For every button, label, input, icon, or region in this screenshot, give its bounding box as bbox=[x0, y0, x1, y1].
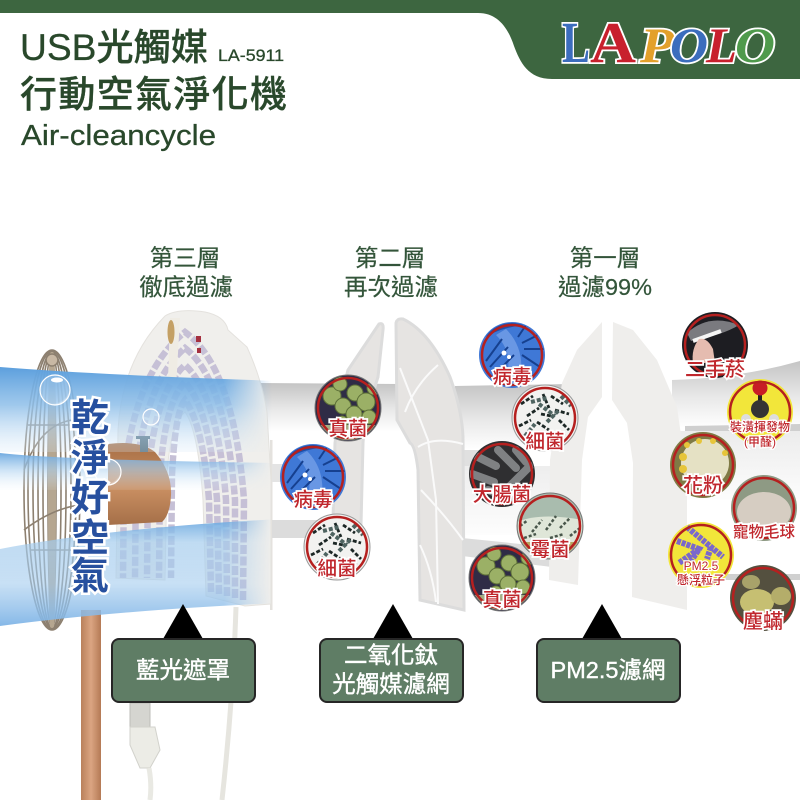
badge: mold bbox=[517, 493, 583, 561]
badge: second-hand smoke: 二手菸 bbox=[685, 358, 745, 381]
badge: dust mites bbox=[730, 565, 796, 633]
logo: L bbox=[705, 17, 737, 73]
button: TiO2 filter bbox=[320, 639, 463, 702]
badge: fungus 2: 真菌 bbox=[482, 589, 522, 611]
layer heading: third layer: 徹底過濾 bbox=[139, 274, 233, 300]
badge: virus 1: 病毒 bbox=[293, 489, 333, 511]
clean-air blue ribbons bbox=[0, 367, 280, 626]
button: TiO2 filter: 光觸媒濾網 bbox=[332, 671, 450, 697]
badge: formaldehyde: (甲醛) bbox=[744, 434, 776, 449]
badge: PM2.5 particles: 懸浮粒子 bbox=[677, 572, 725, 587]
title: 行動空氣淨化機 bbox=[20, 74, 287, 115]
layer heading: second layer bbox=[344, 245, 438, 300]
vertical slogan: 空 bbox=[71, 518, 109, 560]
fan: pole bbox=[81, 610, 101, 800]
badge: mold: 霉菌 bbox=[530, 539, 570, 561]
badge: PM2.5 particles: PM2.5 bbox=[684, 559, 719, 573]
badge: pollen: 花粉 bbox=[683, 474, 723, 497]
button: TiO2 filter: 二氧化鈦 bbox=[344, 642, 438, 668]
filter: third layer arched blue-light shield bbox=[116, 311, 271, 606]
badge: pollen bbox=[670, 432, 736, 498]
layer heading: first layer bbox=[558, 245, 652, 300]
button: PM2.5 filter bbox=[537, 639, 680, 702]
cable bbox=[222, 607, 236, 800]
badge: fungus 1 bbox=[315, 375, 381, 442]
vertical slogan: 氣 bbox=[71, 556, 109, 598]
fan: motor housing bbox=[108, 436, 171, 525]
badge: bacteria 2 bbox=[512, 385, 578, 453]
button: blue light shield: 藍光遮罩 bbox=[136, 657, 230, 683]
title: Air-cleancycle bbox=[21, 120, 216, 152]
button: blue light shield bbox=[112, 639, 255, 702]
badge: formaldehyde bbox=[727, 379, 793, 449]
badge: E. coli bbox=[469, 441, 535, 507]
title: LA-5911 bbox=[218, 46, 284, 65]
badge: E. coli: 大腸菌 bbox=[473, 484, 531, 506]
logo: P bbox=[639, 17, 675, 73]
title: USB光觸媒 bbox=[20, 27, 208, 68]
header band bbox=[0, 0, 800, 79]
badge: bacteria 1: 細菌 bbox=[317, 558, 357, 580]
badge: PM2.5 particles bbox=[668, 522, 734, 588]
badge: virus 2 bbox=[479, 322, 545, 388]
badge: fungus 1: 真菌 bbox=[328, 418, 368, 440]
badge: virus 1 bbox=[280, 444, 346, 511]
layer heading: first layer: 過濾99% bbox=[558, 274, 652, 300]
title bbox=[20, 27, 287, 152]
layer heading: third layer: 第三層 bbox=[150, 245, 220, 271]
layer heading: first layer: 第一層 bbox=[570, 245, 640, 271]
layer heading: second layer: 再次過濾 bbox=[344, 274, 438, 300]
filter: second layer right piece bbox=[396, 319, 464, 610]
vertical slogan: 乾 bbox=[71, 398, 109, 440]
badge: virus 2: 病毒 bbox=[492, 366, 532, 388]
logo: O bbox=[670, 17, 708, 73]
badge: formaldehyde: 裝潢揮發物 bbox=[730, 419, 790, 434]
vertical slogan bbox=[71, 398, 109, 598]
logo: O bbox=[735, 17, 775, 73]
logo bbox=[562, 10, 775, 75]
bubbles bbox=[40, 375, 159, 485]
badge: fungus 2 bbox=[469, 545, 535, 612]
filter: first layer left piece bbox=[549, 322, 602, 585]
badge: dust mites: 塵蟎 bbox=[743, 610, 783, 633]
vertical slogan: 好 bbox=[71, 478, 109, 520]
filter: first layer right piece bbox=[612, 322, 687, 610]
layer heading: second layer: 第二層 bbox=[355, 245, 425, 271]
layer heading: third layer bbox=[139, 245, 233, 300]
badge: bacteria 1 bbox=[304, 514, 370, 580]
grey air ribbons bbox=[258, 361, 800, 610]
badge: pet hair: 寵物毛球 bbox=[733, 522, 795, 541]
usb plug bbox=[130, 703, 160, 800]
pointer triangles bbox=[163, 604, 622, 639]
filter: second layer left piece bbox=[333, 324, 383, 525]
logo: L bbox=[562, 10, 590, 75]
fan: cage bbox=[24, 350, 80, 630]
vertical slogan: 淨 bbox=[71, 438, 109, 480]
badge: bacteria 2: 細菌 bbox=[525, 431, 565, 453]
logo: A bbox=[590, 10, 636, 75]
badge: pet hair bbox=[731, 475, 797, 541]
button: PM2.5 filter: PM2.5濾網 bbox=[551, 657, 665, 683]
badge: second-hand smoke bbox=[682, 312, 748, 381]
